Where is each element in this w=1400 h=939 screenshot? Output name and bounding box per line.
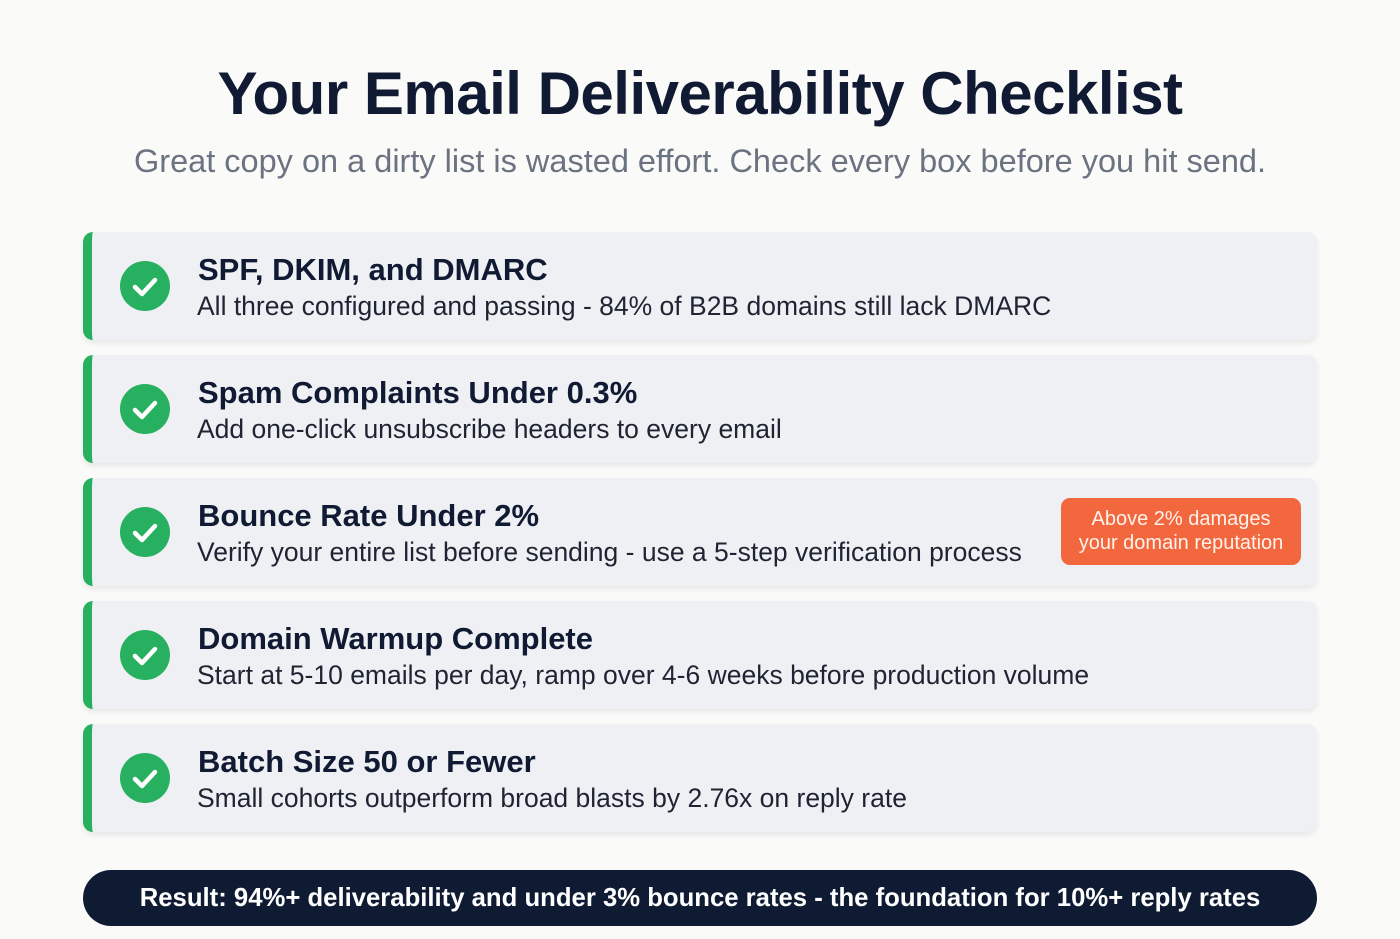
description: Small cohorts outperform broad blasts by 2.76x on reply rate [197,783,907,813]
icon: check [120,507,170,557]
icon: check [120,753,170,803]
description: Verify your entire list before sending - use a 5-step verification process [197,537,1022,567]
description: Start at 5-10 emails per day, ramp over 4-6 weeks before production volume [197,660,1089,690]
callout: warning badge: your domain reputation [1079,532,1283,554]
callout: warning badge: Above 2% damages [1091,508,1270,530]
icon: check [120,261,170,311]
description: Add one-click unsubscribe headers to every email [197,414,782,444]
heading: Batch Size 50 or Fewer [198,744,536,779]
card: batch size [83,724,1317,832]
icon: check [120,384,170,434]
card: spam complaints [83,355,1317,463]
description: All three configured and passing - 84% of B2B domains still lack DMARC [197,291,1051,321]
heading: SPF, DKIM, and DMARC [198,252,548,287]
card: domain warmup [83,601,1317,709]
footer result banner: Result: 94%+ deliverability and under 3% bounce rates - the foundation for 10%+ reply rates [140,884,1260,912]
callout: warning badge [1061,498,1301,565]
icon: check [120,630,170,680]
heading: Bounce Rate Under 2% [198,498,539,533]
card: bounce rate [83,478,1317,586]
title: Your Email Deliverability Checklist [217,60,1183,127]
heading: Domain Warmup Complete [198,621,593,656]
subtitle: Great copy on a dirty list is wasted effort. Check every box before you hit send. [134,143,1266,179]
heading: Spam Complaints Under 0.3% [198,375,637,410]
card: SPF DKIM DMARC [83,232,1317,340]
footer result banner [83,870,1317,926]
